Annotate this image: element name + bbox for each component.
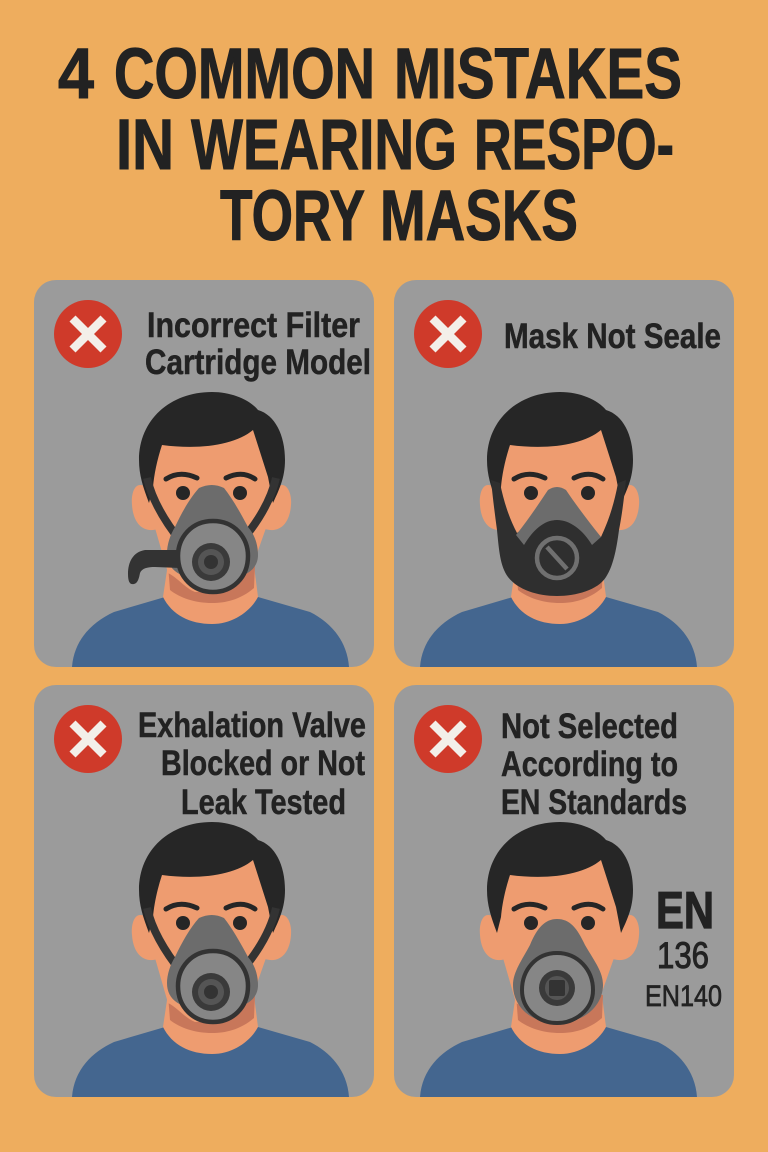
heading: not selected: EN Standards	[501, 783, 687, 822]
heading: exhalation valve	[138, 706, 366, 822]
heading: not selected: Not Selected	[501, 707, 678, 746]
panel: incorrect filter cartridge model	[34, 280, 374, 667]
heading: exhalation valve: Exhalation Valve	[138, 706, 366, 745]
illustration: man with half mask	[72, 822, 349, 1097]
heading: exhalation valve: Leak Tested	[181, 783, 346, 822]
title: TORY	[220, 177, 365, 256]
icon: red cross	[414, 705, 482, 773]
panel: not selected according to EN standards	[394, 685, 734, 1097]
heading: incorrect filter	[145, 306, 371, 382]
EN standard labels: 136	[657, 935, 709, 976]
icon: red cross	[414, 300, 482, 368]
icon: red cross	[54, 300, 122, 368]
heading: exhalation valve: Blocked or Not	[161, 744, 365, 783]
title: RESPO-	[474, 106, 674, 185]
title: COMMON	[114, 35, 375, 114]
panel: exhalation valve blocked	[34, 685, 374, 1097]
title: 4	[58, 35, 94, 114]
illustration: man with wrong cartridge	[72, 392, 349, 667]
icon: red cross	[54, 705, 122, 773]
heading: mask not seale: Mask Not Seale	[504, 317, 721, 356]
EN standard labels: EN	[656, 882, 714, 940]
EN standard labels: EN140	[645, 980, 722, 1013]
illustration: man with beard under mask	[420, 392, 697, 667]
title: MISTAKES	[394, 35, 682, 114]
heading: incorrect filter: Incorrect Filter	[147, 306, 360, 345]
heading: not selected: According to	[501, 745, 678, 784]
title	[58, 35, 682, 256]
EN standard labels	[645, 882, 722, 1013]
title: IN	[116, 106, 174, 185]
panel: mask not sealed	[394, 280, 734, 667]
title: MASKS	[380, 177, 578, 256]
heading: not selected	[501, 707, 687, 822]
title: WEARING	[191, 106, 457, 185]
heading: incorrect filter: Cartridge Model	[145, 343, 371, 382]
illustration: man with full cup mask	[420, 822, 697, 1097]
